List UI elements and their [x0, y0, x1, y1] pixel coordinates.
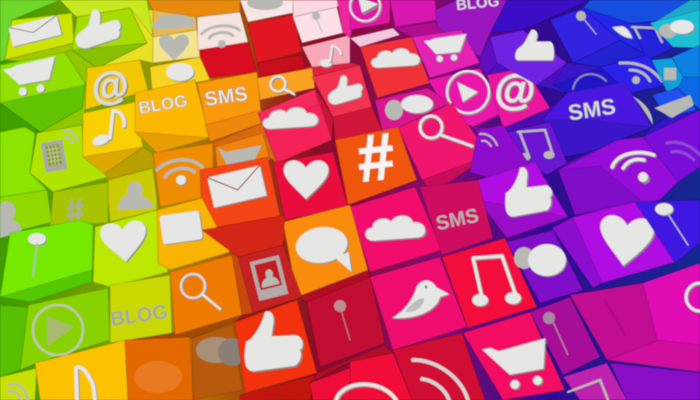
icon: magnifier	[270, 76, 294, 94]
icon: at: @	[495, 66, 535, 113]
label: BLOG: BLOG	[109, 301, 169, 331]
cube: person yellow	[108, 168, 157, 222]
cube: top white	[240, 0, 293, 22]
cube: big orange	[35, 337, 193, 400]
cube: left person green	[0, 190, 52, 238]
cube: envelope red-orange	[200, 157, 285, 255]
cube: note red	[442, 238, 537, 328]
icon: play	[447, 71, 489, 113]
cube: top pale and magenta row	[337, 0, 450, 47]
cube: thumb lime	[72, 6, 147, 68]
icon: speech bubbles	[196, 337, 246, 366]
icon: note	[320, 46, 341, 67]
icon: cart	[218, 145, 262, 167]
icon: heart	[596, 214, 655, 269]
cube: play green	[20, 288, 110, 370]
icon: magnifier	[420, 116, 472, 146]
cube: thumb purple lower	[472, 162, 568, 238]
cube: envelope yellow-green	[5, 13, 74, 62]
cube: right blue	[672, 45, 700, 110]
icon: thumb	[244, 311, 303, 371]
cube: bottom right purple	[610, 363, 700, 400]
label: SMS: SMS	[434, 205, 481, 235]
cube: pin blue	[635, 200, 700, 263]
cube: cloud pink-red	[258, 89, 332, 163]
icon: box	[159, 210, 203, 245]
cube: magnifier orange	[170, 255, 242, 335]
icon: cart	[482, 338, 553, 394]
cube: pin pale	[293, 0, 350, 43]
cube: big magenta	[570, 263, 700, 372]
cube: bird blue	[583, 8, 647, 55]
icon: pin	[576, 11, 596, 34]
cube: wifi purple main	[558, 137, 678, 215]
icon: cloud	[363, 214, 426, 241]
icon: frame	[568, 380, 608, 400]
cube: cart magenta	[412, 30, 480, 78]
cube: faded heart	[153, 30, 200, 63]
icon: at sign: @	[89, 64, 132, 110]
cube: bird pink	[370, 257, 467, 350]
cube: thumb purple	[490, 29, 567, 85]
icon: dim play	[573, 74, 606, 89]
icon: keypad	[41, 139, 67, 173]
icon: play	[33, 305, 83, 355]
icon: speech top	[247, 0, 283, 10]
icon: hash: #	[354, 118, 398, 196]
icon: heart	[99, 220, 149, 264]
icon: envelope	[207, 165, 267, 208]
label: BLOG: BLOG	[137, 91, 189, 118]
cube: magnifier orange	[257, 68, 315, 100]
icon: hash: #	[63, 191, 87, 231]
icon: speech	[166, 63, 194, 81]
cube: thumb pink	[312, 65, 372, 117]
cube: left dim green	[0, 305, 28, 377]
cube: wifi bottom red	[393, 333, 485, 400]
cube: BLOG lime	[109, 275, 172, 343]
icon: dim pin	[605, 300, 625, 335]
cube: cloud red	[360, 37, 430, 98]
icon: photo frame	[250, 255, 288, 301]
cube: @ yellow	[85, 60, 148, 110]
cube: pin purple	[530, 297, 600, 375]
icon: speech bubbles	[385, 95, 433, 120]
cube: cart pink	[463, 312, 565, 400]
cube: teal	[650, 10, 700, 48]
cube: cloud pink	[350, 187, 442, 272]
icon: dim wifi	[667, 142, 700, 160]
cube: note yellow	[82, 102, 143, 177]
cube: left green	[0, 127, 47, 197]
icon: wifi + grid	[480, 134, 497, 146]
cube: SMS dark red	[420, 180, 493, 255]
icon: cart	[2, 56, 61, 98]
icon: ring	[686, 283, 700, 311]
label: SMS: SMS	[203, 83, 249, 111]
cube: box orange-yellow	[157, 198, 230, 270]
icon: pin	[655, 203, 688, 245]
icon: ring	[336, 384, 396, 400]
cube: pin green	[0, 220, 93, 302]
cube: photo dark red	[202, 215, 302, 313]
cube: wifi purple right	[643, 110, 700, 182]
icon: speech	[293, 224, 352, 279]
cube: SMS blue	[542, 82, 653, 157]
cube: pin dark red	[307, 277, 385, 367]
cube: play magenta	[428, 68, 503, 127]
cube: note blue	[630, 22, 675, 60]
icon: magnifier	[181, 274, 220, 309]
icon: envelope	[654, 95, 694, 118]
cube: cart green	[0, 52, 85, 132]
icon: music note	[91, 111, 124, 148]
cube: BLOG purple	[435, 0, 507, 57]
cube: speech orange	[283, 205, 368, 297]
icon: bird	[392, 280, 449, 318]
icon: thumb	[326, 73, 364, 105]
icon: person	[0, 202, 22, 238]
icon: wifi	[413, 360, 468, 400]
icon: dim speech	[134, 361, 182, 393]
icon: cloud	[370, 47, 421, 68]
icon: play top	[350, 0, 380, 21]
icon: wifi	[612, 153, 654, 182]
cube: speech pink	[375, 88, 450, 133]
cube: bottom magenta	[563, 363, 627, 400]
cube: wifi red	[197, 12, 257, 78]
cube: thumb red	[235, 300, 317, 400]
icon: person	[118, 182, 154, 210]
cube: pin blue	[550, 8, 620, 63]
cube: speech purple	[507, 230, 583, 303]
icon: wifi	[201, 24, 241, 50]
cube: heart red	[273, 152, 348, 220]
cube: top orange	[147, 0, 240, 17]
icon: heart edge	[633, 96, 653, 125]
icon: note	[632, 27, 662, 42]
cube: note purple	[503, 122, 567, 175]
cube: BLOG yellow	[135, 80, 210, 153]
cube: cloud yellow	[150, 57, 210, 90]
cube: speech dark orange	[192, 325, 246, 400]
cube: hash orange	[335, 118, 417, 205]
icon: heart	[159, 35, 189, 60]
icon: cloud	[151, 11, 195, 30]
icon: double note	[518, 130, 554, 160]
icon: wifi	[8, 384, 28, 400]
cube: envelope blue	[652, 88, 697, 118]
icon: bird	[612, 26, 632, 38]
cube: keyboard cube lime	[30, 125, 108, 192]
cube: dim play blue	[553, 67, 630, 93]
cube: SMS orange	[197, 72, 262, 142]
icon: wifi	[620, 63, 662, 84]
icon: note	[76, 367, 95, 400]
icon: envelope	[8, 15, 62, 47]
icon: heart	[284, 160, 328, 199]
cube: heart lime	[93, 210, 168, 287]
icon: double note	[472, 256, 521, 306]
cube: keyboard purple	[470, 125, 530, 178]
cube: cart orange	[215, 133, 270, 167]
icon: thumbs up	[72, 6, 123, 50]
cube: bottom-left lime	[0, 368, 37, 400]
cube: teal mid	[652, 58, 687, 92]
icon: pin	[334, 300, 350, 340]
icon: pin	[543, 312, 568, 355]
icon: square	[664, 68, 676, 80]
icon: pin	[312, 12, 322, 32]
icon: cart	[423, 34, 469, 63]
cube: heart purple	[552, 202, 675, 288]
cube: hash lime	[50, 182, 108, 231]
cube: top-left strip	[0, 0, 153, 62]
icon: wifi	[157, 160, 202, 185]
cube: faded cloud	[151, 3, 197, 37]
icon: thumb	[503, 166, 553, 217]
icon: speech teal	[659, 20, 694, 38]
cube: bottom red ring	[310, 345, 412, 400]
cube: top blues	[490, 0, 700, 33]
label: SMS: SMS	[566, 93, 617, 126]
cube: wifi blue	[600, 55, 675, 93]
icon: thumb	[515, 29, 554, 60]
icon: pin	[28, 233, 46, 276]
cube: red below	[248, 15, 305, 77]
icon: speech bubbles	[514, 244, 566, 276]
cube: at magenta	[487, 66, 550, 128]
cube: wifi orange	[153, 143, 213, 207]
cube: magnifier pink	[398, 103, 490, 193]
icon: keypad wifi	[63, 131, 77, 142]
icon: cloud	[261, 106, 319, 129]
cube: note pale	[302, 35, 350, 67]
